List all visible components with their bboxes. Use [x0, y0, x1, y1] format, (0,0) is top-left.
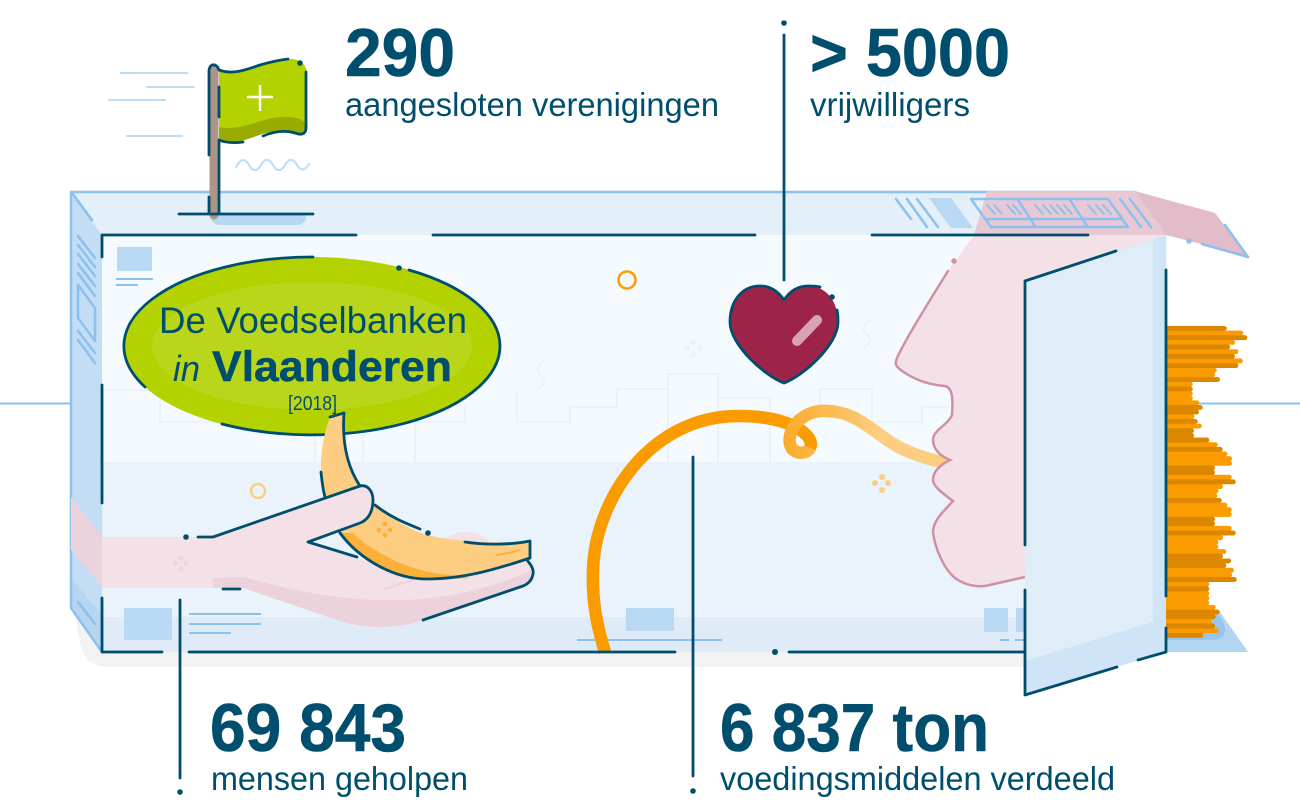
flag outline — [179, 59, 313, 214]
stat: meer dan 5000 vrijwilligers: vrijwilligers — [810, 86, 970, 123]
inner ellipse highlight — [152, 282, 472, 410]
floor shadow right — [1167, 612, 1248, 652]
title text: in — [173, 348, 200, 389]
box floor — [102, 617, 1167, 652]
box lower wall — [102, 462, 1167, 617]
title text — [159, 300, 467, 415]
title text: De Voedselbanken — [159, 300, 467, 341]
stat: 290 aangesloten verenigingen: 290 — [345, 15, 455, 91]
stat: meer dan 5000 vrijwilligers — [810, 15, 1010, 123]
flag plus sign — [247, 85, 273, 111]
box top panel — [70, 191, 1167, 235]
banana dots — [377, 522, 392, 537]
box top edge — [71, 192, 1155, 652]
arm and palm — [71, 497, 533, 627]
left panel lower shade — [70, 577, 102, 652]
stacked food bars — [1158, 328, 1245, 635]
flag cloth — [219, 59, 307, 142]
leader line: voedingsmiddelen — [690, 457, 696, 794]
stat: 290 aangesloten verenigingen: aangesloten verenigingen — [345, 86, 719, 123]
face in profile — [896, 235, 1166, 586]
box left panel — [70, 191, 102, 652]
flag cloth shade — [219, 117, 307, 142]
palm bump — [442, 532, 490, 560]
banana shaded side — [340, 533, 470, 579]
open door panel — [1025, 235, 1166, 695]
arm on left panel — [71, 497, 102, 587]
stat: 290 aangesloten verenigingen — [345, 15, 719, 123]
stat: 6 837 ton voedingsmiddelen verdeeld — [720, 690, 1115, 797]
box drop shadow — [75, 613, 1030, 667]
pink flap over top panel — [974, 191, 1166, 235]
floor label blocks — [124, 608, 1028, 640]
flag base shadow — [210, 214, 306, 225]
door outline — [1025, 251, 1166, 695]
palm shade — [213, 571, 532, 627]
food tube — [593, 411, 949, 652]
stat: 69 843 mensen geholpen: mensen geholpen — [211, 760, 468, 797]
banana — [321, 413, 530, 579]
leader line: mensen geholpen — [177, 600, 183, 795]
palm fill — [102, 537, 533, 627]
box lid flap — [1135, 191, 1248, 257]
heart icon — [730, 286, 838, 383]
stat: 6 837 ton voedingsmiddelen verdeeld: voedingsmiddelen verdeeld — [720, 760, 1115, 797]
back wall label block — [116, 247, 153, 285]
flag — [179, 59, 313, 225]
open box — [70, 191, 1167, 652]
top panel markings — [896, 198, 973, 228]
banana outline — [321, 413, 530, 579]
hand outline — [183, 486, 533, 620]
faint squiggles and dots — [537, 319, 871, 389]
ellipse outline — [124, 257, 500, 435]
stat: meer dan 5000 vrijwilligers: > 5000 — [810, 15, 1010, 91]
left panel markings — [78, 236, 95, 624]
leader line: vrijwilligers — [781, 20, 787, 280]
palm crease — [385, 580, 413, 589]
stat: 69 843 mensen geholpen — [210, 690, 468, 797]
door inner face — [1025, 240, 1153, 661]
banana fill — [321, 413, 530, 579]
wind lines — [109, 73, 309, 170]
horizon line — [0, 402, 1300, 404]
top panel block — [929, 198, 973, 228]
box back wall — [102, 235, 1167, 462]
decorative circles and dots — [251, 272, 891, 498]
box front frame — [102, 235, 1088, 655]
banana highlight — [497, 550, 520, 555]
heart highlight — [797, 320, 817, 341]
title text: Vlaanderen — [212, 343, 452, 391]
thumb over banana — [205, 486, 373, 575]
top panel grid — [971, 199, 1151, 227]
stat: 6 837 ton voedingsmiddelen verdeeld: 6 837 ton — [720, 690, 989, 766]
flag pole — [210, 68, 218, 215]
title text: [2018] — [288, 393, 337, 415]
stat: 69 843 mensen geholpen: 69 843 — [210, 690, 406, 766]
arm hair dots — [172, 555, 189, 572]
faint skyline — [102, 374, 950, 462]
green title ellipse — [124, 257, 500, 435]
